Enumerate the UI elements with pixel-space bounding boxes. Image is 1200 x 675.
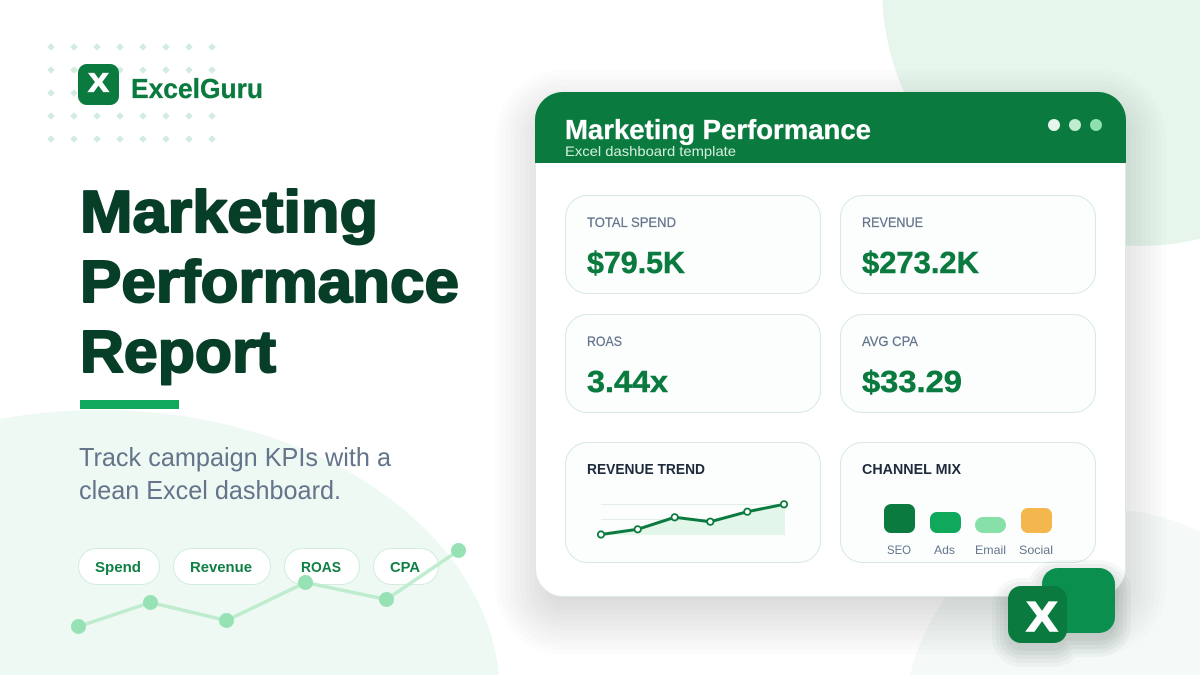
decorative line chart [71,543,466,634]
header subtitle: Excel dashboard template [565,143,736,159]
bar labels: Email [975,543,1006,557]
dot grid pattern [48,44,215,142]
line chart [598,501,787,538]
background shape: bottom left ellipse [0,410,499,675]
main title: Performance [80,249,459,315]
KPI: revenue: REVENUE [862,214,923,230]
KPI: ROAS: 3.44x [587,364,669,399]
KPI: average CPA: $33.29 [862,364,962,399]
card shadow [495,70,1166,655]
card body [536,92,1126,596]
brand name: ExcelGuru [131,73,263,104]
accent bar [80,400,179,409]
pill: Revenue: Revenue [190,559,252,576]
KPI: average CPA [840,314,1096,412]
KPI: ROAS: ROAS [587,333,622,349]
icon: Excel badge: X [1026,593,1058,640]
pill: Spend: Spend [95,559,141,576]
icon: Excel badge [992,560,1131,667]
bar chart [884,504,1052,533]
pill: CPA: CPA [390,559,420,576]
dashboard card [535,92,1126,596]
KPI: ROAS [566,314,820,412]
KPI: average CPA: AVG CPA [862,333,919,349]
panel: channel mix: CHANNEL MIX [862,462,961,478]
bar labels: Ads [934,543,955,557]
panel: channel mix [840,442,1096,562]
logo: ExcelGuru [78,64,263,105]
KPI: total spend: TOTAL SPEND [587,214,676,230]
card header [535,92,1126,163]
background shape: top right circle [882,0,1200,246]
metric pills [78,548,438,584]
bar labels: Social [1019,543,1053,557]
pill: ROAS [284,548,360,584]
header title: Marketing Performance [565,114,871,145]
KPI: revenue [840,196,1096,294]
main title [80,179,459,385]
main title: Marketing [80,179,378,245]
subtitle: Track campaign KPIs with a [79,442,392,472]
icon: logo tile: X [88,67,109,97]
badge shadow [992,560,1131,667]
window dots [1048,119,1102,131]
pill: ROAS: ROAS [301,559,341,576]
bar labels [887,543,1053,557]
panel: revenue trend: REVENUE TREND [587,462,705,478]
pill: Revenue [174,548,270,584]
KPI: total spend: $79.5K [587,245,686,280]
bar labels: SEO [887,543,911,557]
pill: CPA [374,548,438,584]
panel: revenue trend [566,442,820,562]
subtitle [79,442,392,505]
icon: logo tile [78,64,119,105]
background shape: bottom right ellipse [910,510,1200,675]
pill: Spend [78,548,160,584]
subtitle: clean Excel dashboard. [79,475,341,505]
KPI: revenue: $273.2K [862,245,980,280]
KPI: total spend [566,196,820,294]
main title: Report [80,319,276,385]
